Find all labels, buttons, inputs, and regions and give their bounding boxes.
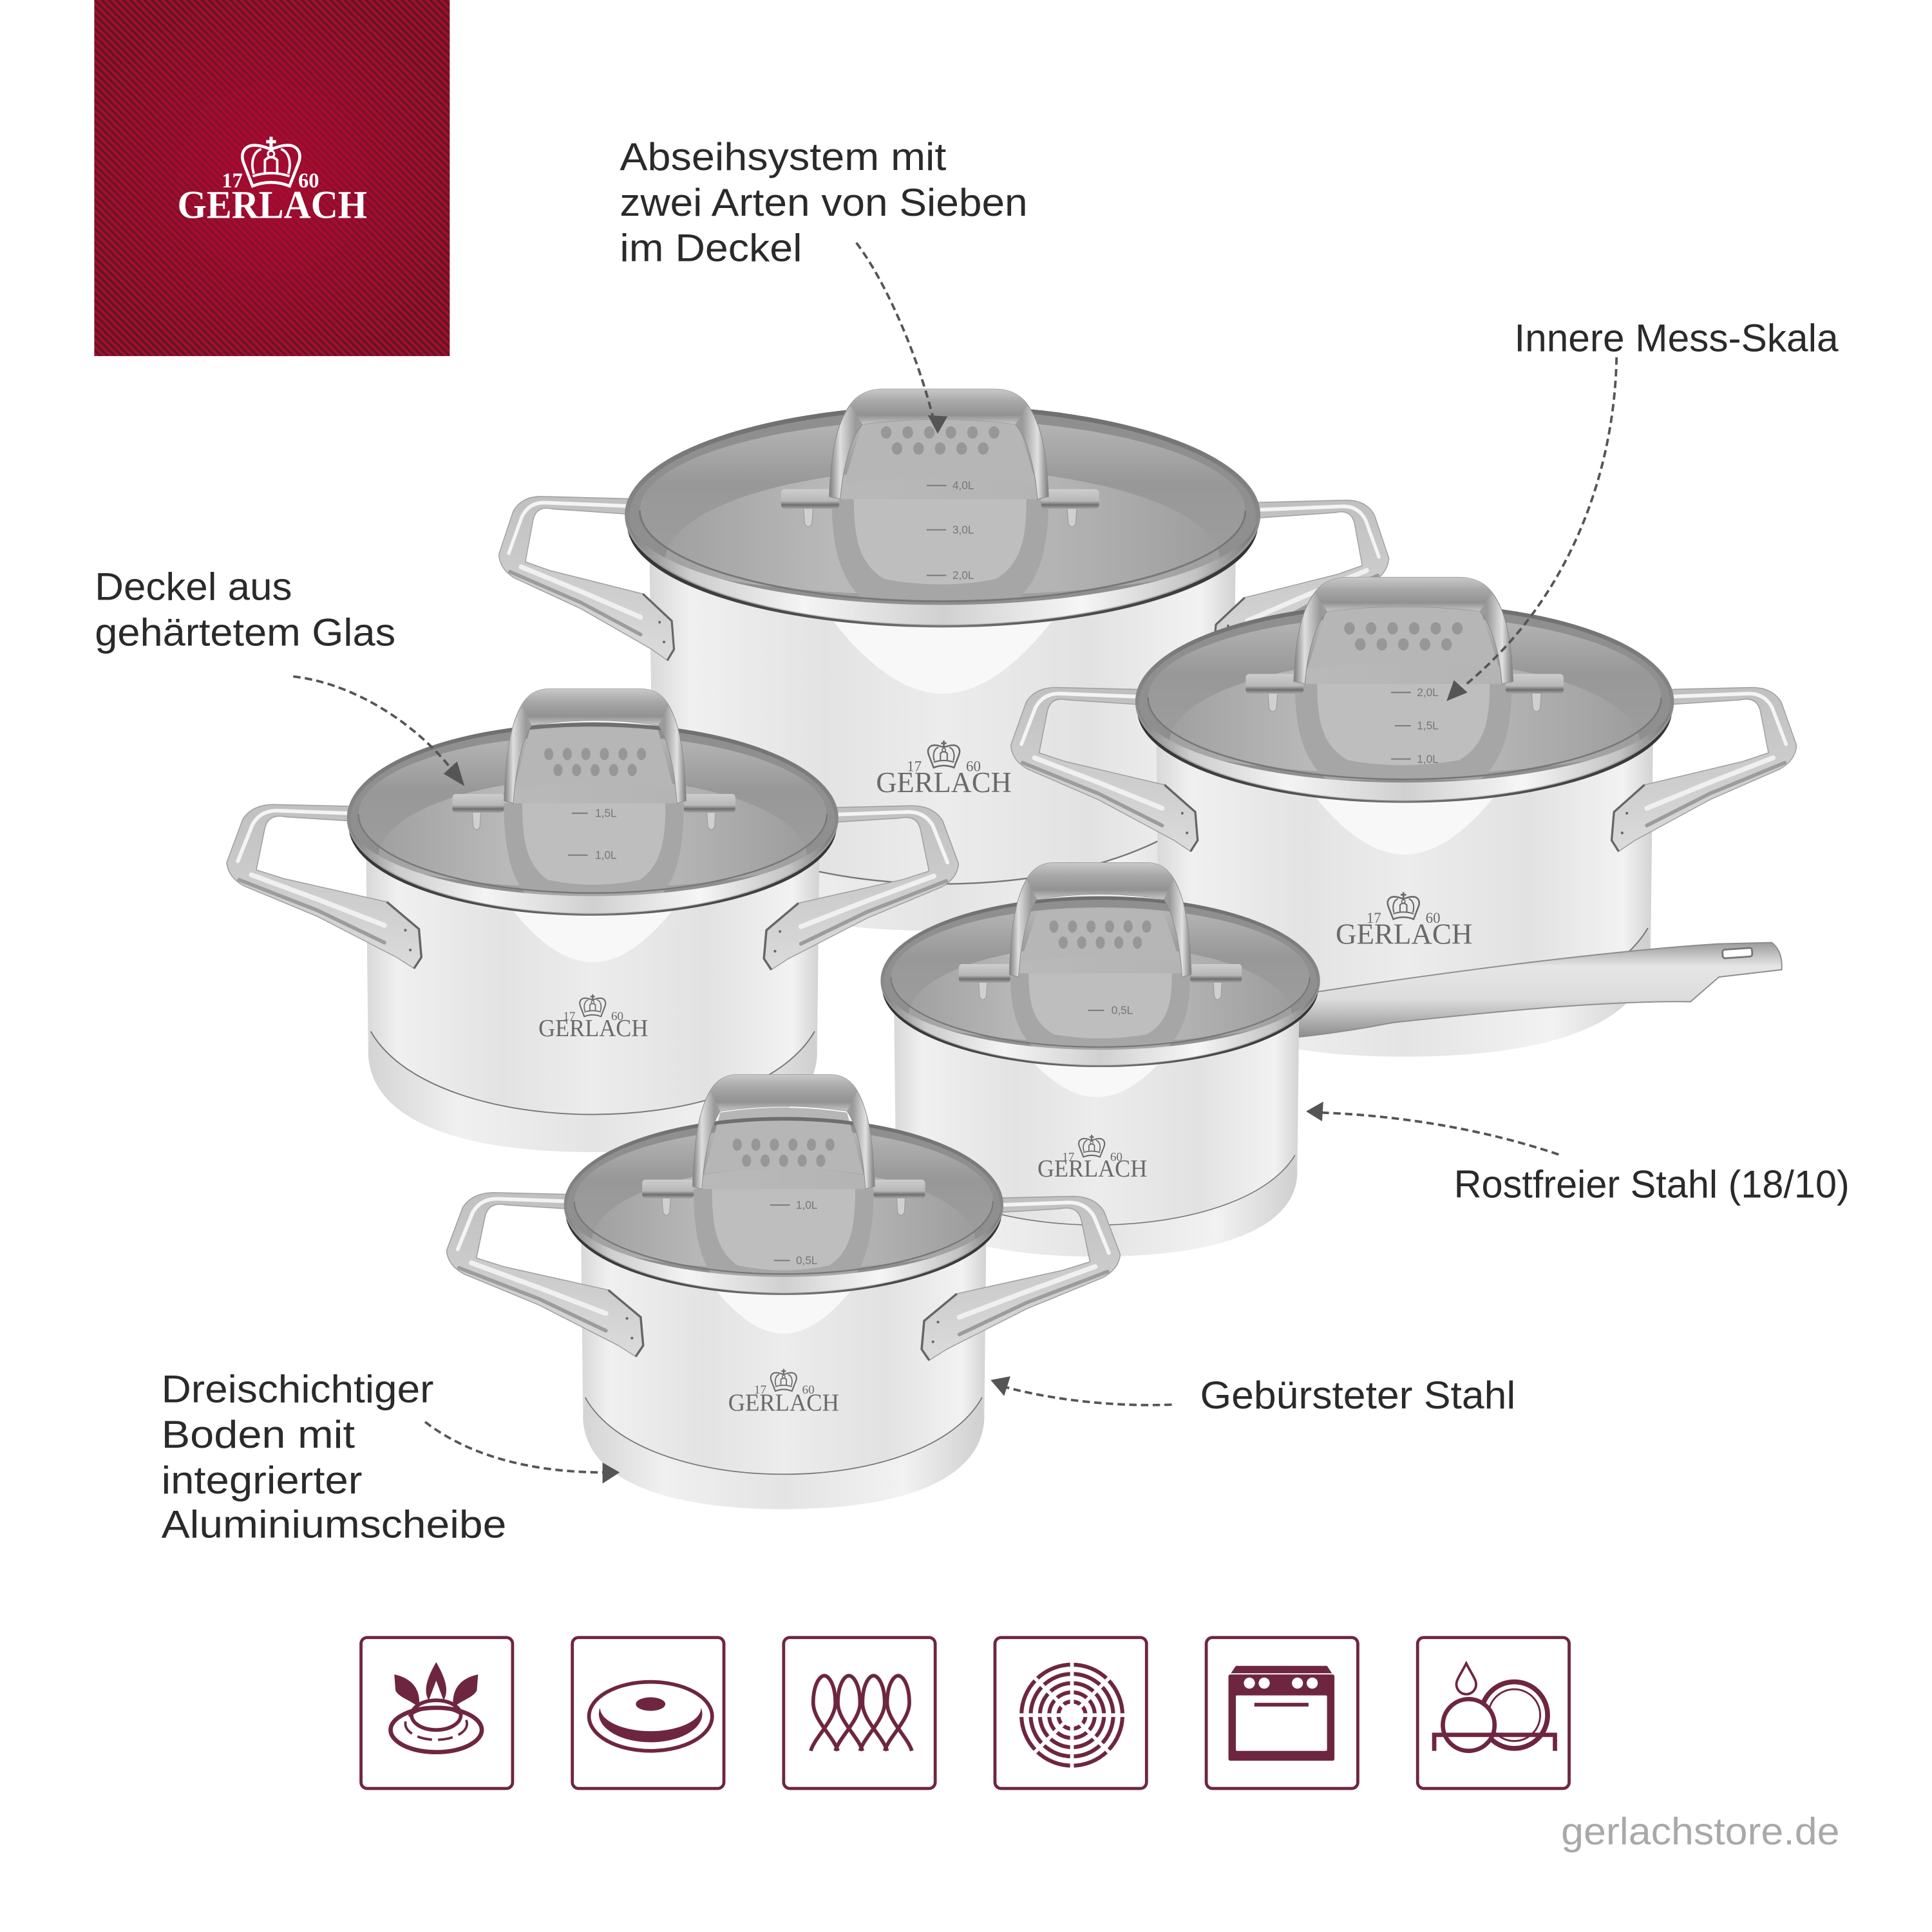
icon: dishwasher xyxy=(1417,1638,1569,1788)
pot logo xyxy=(1336,892,1472,951)
handle: right xyxy=(1214,500,1389,664)
measuring scale: 3,0L xyxy=(952,523,974,536)
measuring scale xyxy=(1088,1004,1133,1017)
label: Dreischichtiger Boden: Aluminiumscheibe xyxy=(162,1502,506,1546)
pot logo: GERLACH xyxy=(538,1015,648,1042)
icon: electric coil xyxy=(784,1638,935,1788)
measuring scale: 2,0L xyxy=(952,569,974,582)
label: Innere Mess-Skala: Innere Mess-Skala xyxy=(1514,316,1839,359)
icon: ceramic hob xyxy=(573,1638,724,1788)
pot: right pot xyxy=(1010,577,1797,1057)
icon: induction xyxy=(995,1638,1146,1788)
pot logo xyxy=(1037,1135,1147,1182)
pot logo xyxy=(728,1369,839,1417)
pot: saucepan xyxy=(882,863,1782,1256)
icon: crown xyxy=(242,137,299,186)
pot: left pot xyxy=(227,689,959,1152)
label: Abseihsystem: im Deckel xyxy=(620,226,802,270)
label: Gebürsteter Stahl: Gebürsteter Stahl xyxy=(1200,1373,1515,1417)
handle: left xyxy=(446,1193,643,1357)
pot logo: 17 xyxy=(1367,910,1381,926)
label: Dreischichtiger Boden: Boden mit xyxy=(162,1412,355,1456)
measuring scale: 0,5L xyxy=(1112,1004,1133,1017)
website url: gerlachstore.de xyxy=(1561,1810,1840,1853)
icon: gas burner xyxy=(361,1638,513,1788)
label: Dreischichtiger Boden: Dreischichtiger xyxy=(162,1367,433,1410)
label: Deckel aus xyxy=(95,565,395,654)
logo year left: 17 xyxy=(222,169,243,193)
glass lid xyxy=(348,689,837,916)
label: Deckel aus: gehärtetem Glas xyxy=(95,611,395,654)
logo year right: 60 xyxy=(298,169,319,193)
pot logo: 17 xyxy=(1062,1150,1075,1164)
arrow: Deckel aus xyxy=(293,676,464,786)
glass lid xyxy=(627,389,1258,627)
measuring scale xyxy=(770,1198,817,1267)
pot logo: GERLACH xyxy=(1037,1155,1147,1182)
measuring scale xyxy=(927,479,974,582)
pot logo xyxy=(538,994,648,1042)
pot body xyxy=(649,531,1236,931)
pot body xyxy=(581,1213,987,1509)
arrow: Rostfreier Stahl xyxy=(1306,1101,1558,1155)
label: Abseihsystem: zwei Arten von Sieben xyxy=(620,180,1028,224)
arrow: Gebürsteter Stahl xyxy=(990,1376,1172,1405)
measuring scale: 2,0L xyxy=(1417,686,1439,699)
pot logo: GERLACH xyxy=(876,766,1012,799)
pot: large back pot xyxy=(498,389,1389,931)
icon: oven xyxy=(1206,1638,1358,1788)
arrow: Innere Mess-Skala xyxy=(1446,357,1616,701)
measuring scale: 1,0L xyxy=(1417,752,1439,765)
label: Abseihsystem: Abseihsystem mit xyxy=(620,135,947,178)
pot logo: GERLACH xyxy=(728,1390,839,1417)
panel: brand logo square xyxy=(94,0,450,356)
measuring scale xyxy=(1391,686,1439,765)
pot logo: 60 xyxy=(1110,1150,1122,1164)
handle: left xyxy=(498,497,674,661)
glass lid xyxy=(1137,577,1672,803)
handle: right xyxy=(764,806,959,970)
pan handle xyxy=(1294,943,1782,1037)
measuring scale: 1,0L xyxy=(595,849,617,862)
glass lid xyxy=(882,863,1318,1067)
handle: left xyxy=(227,804,421,969)
measuring scale: 0,5L xyxy=(796,1254,817,1267)
measuring scale: 1,5L xyxy=(1417,719,1439,732)
pot body xyxy=(1156,715,1653,1057)
label: Dreischichtiger Boden: integrierter xyxy=(162,1458,362,1502)
label: Deckel aus: Deckel aus xyxy=(95,565,292,609)
label: Dreischichtiger Boden xyxy=(162,1367,506,1546)
glass lid xyxy=(565,1075,1001,1295)
measuring scale: 1,0L xyxy=(796,1198,817,1211)
pot logo: 60 xyxy=(966,759,981,775)
pot body xyxy=(366,831,820,1152)
pot logo: 60 xyxy=(1426,910,1441,926)
arrow: Abseihsystem xyxy=(857,243,947,433)
pot logo: GERLACH xyxy=(1336,918,1472,951)
measuring scale: 1,5L xyxy=(595,806,617,819)
handle: right xyxy=(1612,687,1797,851)
handle: left xyxy=(1010,687,1198,851)
label: Rostfreier Stahl: Rostfreier Stahl (18/10) xyxy=(1454,1162,1850,1206)
handle: right xyxy=(922,1197,1120,1360)
measuring scale xyxy=(568,806,617,862)
logo wordmark: GERLACH xyxy=(178,184,367,227)
pot logo: 60 xyxy=(802,1383,815,1397)
pot logo: 17 xyxy=(563,1010,576,1023)
pot logo: 17 xyxy=(907,759,922,775)
arrow: Dreischichtiger Boden xyxy=(425,1422,620,1484)
pot logo xyxy=(876,741,1012,799)
pot logo: 60 xyxy=(611,1010,623,1023)
pot logo: 17 xyxy=(754,1383,766,1397)
pot: front small pot xyxy=(446,1075,1120,1509)
pot body xyxy=(894,987,1300,1256)
label: Abseihsystem xyxy=(620,135,1028,270)
measuring scale: 4,0L xyxy=(952,479,974,492)
